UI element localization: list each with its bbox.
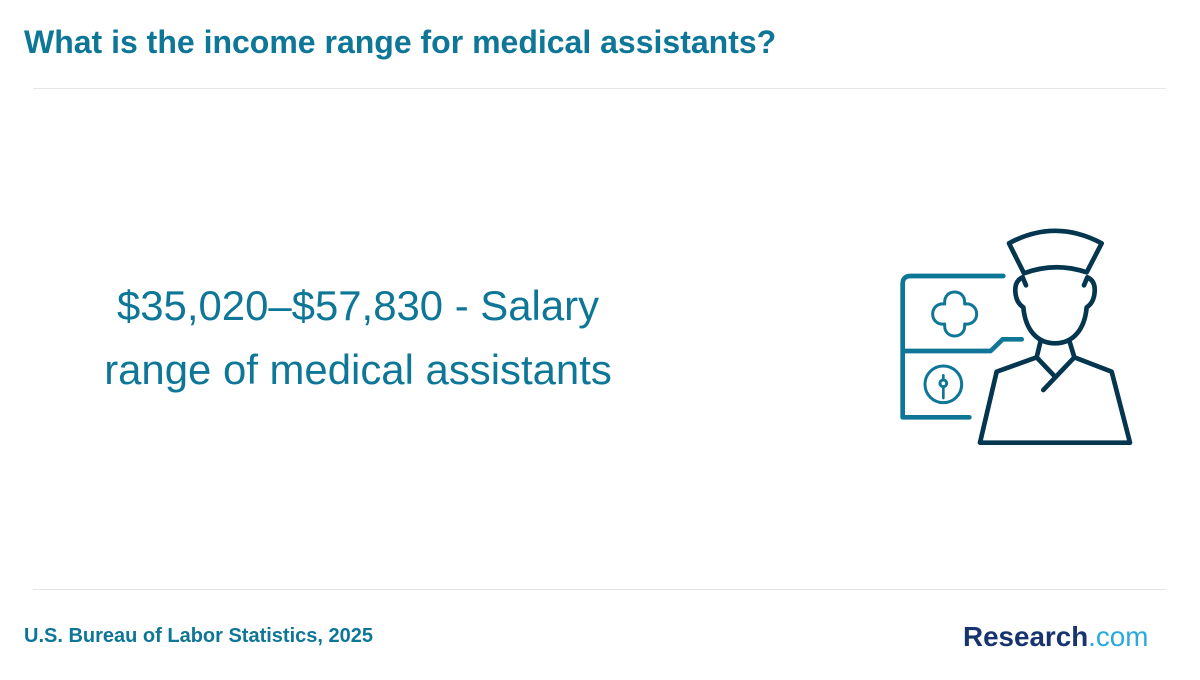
icon: medical chart panel (903, 276, 1022, 417)
salary statement: range of medical assistants (104, 346, 612, 393)
logo: Research.com: Research.com (963, 621, 1148, 652)
icon: medical assistant with chart (900, 228, 1132, 445)
salary statement: $35,020–$57,830 - Salary (117, 282, 599, 329)
salary statement (104, 282, 612, 393)
source note: U.S. Bureau of Labor Statistics, 2025 (24, 625, 373, 647)
icon: nurse figure (980, 231, 1130, 443)
title: What is the income range for medical assistants? (24, 24, 776, 60)
